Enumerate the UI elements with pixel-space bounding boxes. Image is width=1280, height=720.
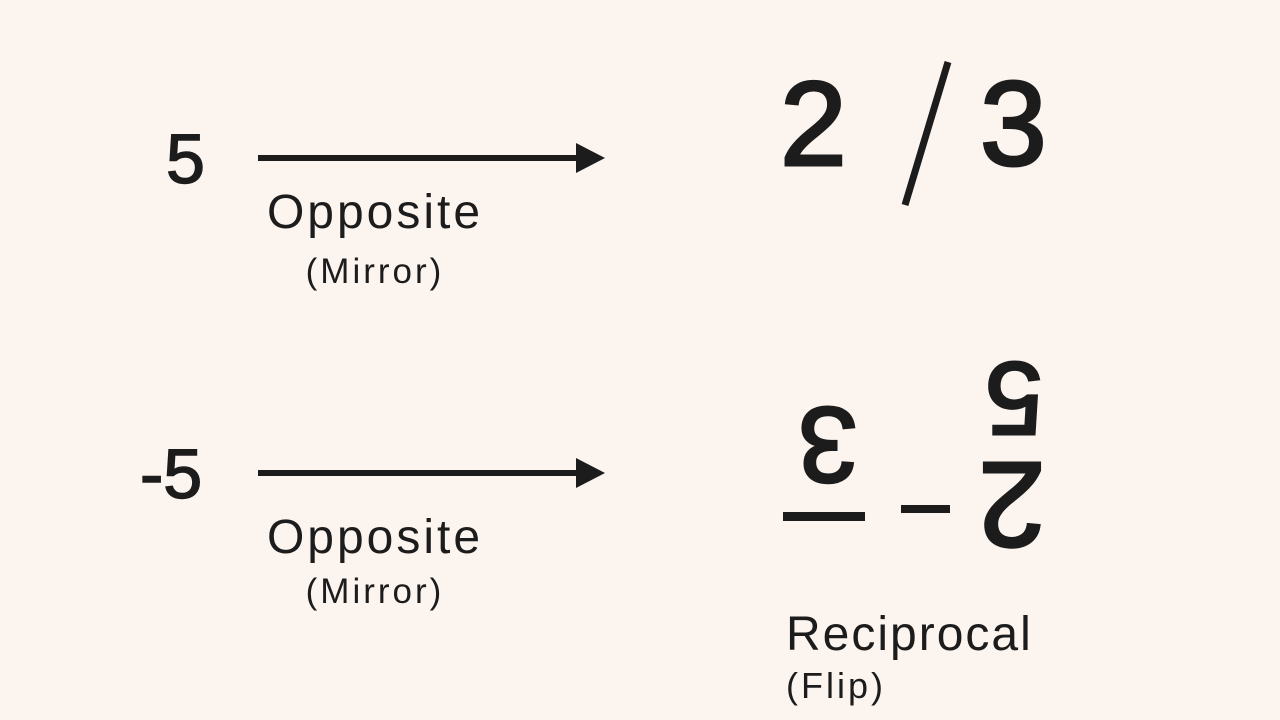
label: Opposite (Mirror) 1 bbox=[267, 186, 483, 291]
label: Opposite (Mirror) 1: (Mirror) bbox=[306, 252, 444, 291]
flipped fraction bbox=[783, 341, 1046, 573]
label: Reciprocal (Flip): Reciprocal bbox=[786, 608, 1033, 661]
fraction 2/3 bbox=[780, 57, 1047, 205]
label: Opposite (Mirror) 2: (Mirror) bbox=[306, 572, 444, 611]
label: Reciprocal (Flip): (Flip) bbox=[786, 665, 886, 706]
row 2: number -5: -5 bbox=[140, 435, 202, 513]
label: Opposite (Mirror) 2 bbox=[267, 511, 483, 611]
label: Reciprocal (Flip) bbox=[786, 608, 1033, 706]
label: Opposite (Mirror) 1: Opposite bbox=[267, 186, 483, 239]
arrow 1 bbox=[258, 143, 605, 173]
row 1: number 5: 5 bbox=[166, 120, 205, 198]
label: Opposite (Mirror) 2: Opposite bbox=[267, 511, 483, 564]
flipped fraction: 3 bbox=[798, 385, 858, 505]
flipped fraction: 2 bbox=[978, 437, 1046, 573]
flipped fraction: 5 bbox=[985, 341, 1043, 456]
fraction 2/3: 2 bbox=[780, 57, 847, 191]
fraction 2/3: 3 bbox=[980, 57, 1047, 191]
arrow 2 bbox=[258, 458, 605, 488]
